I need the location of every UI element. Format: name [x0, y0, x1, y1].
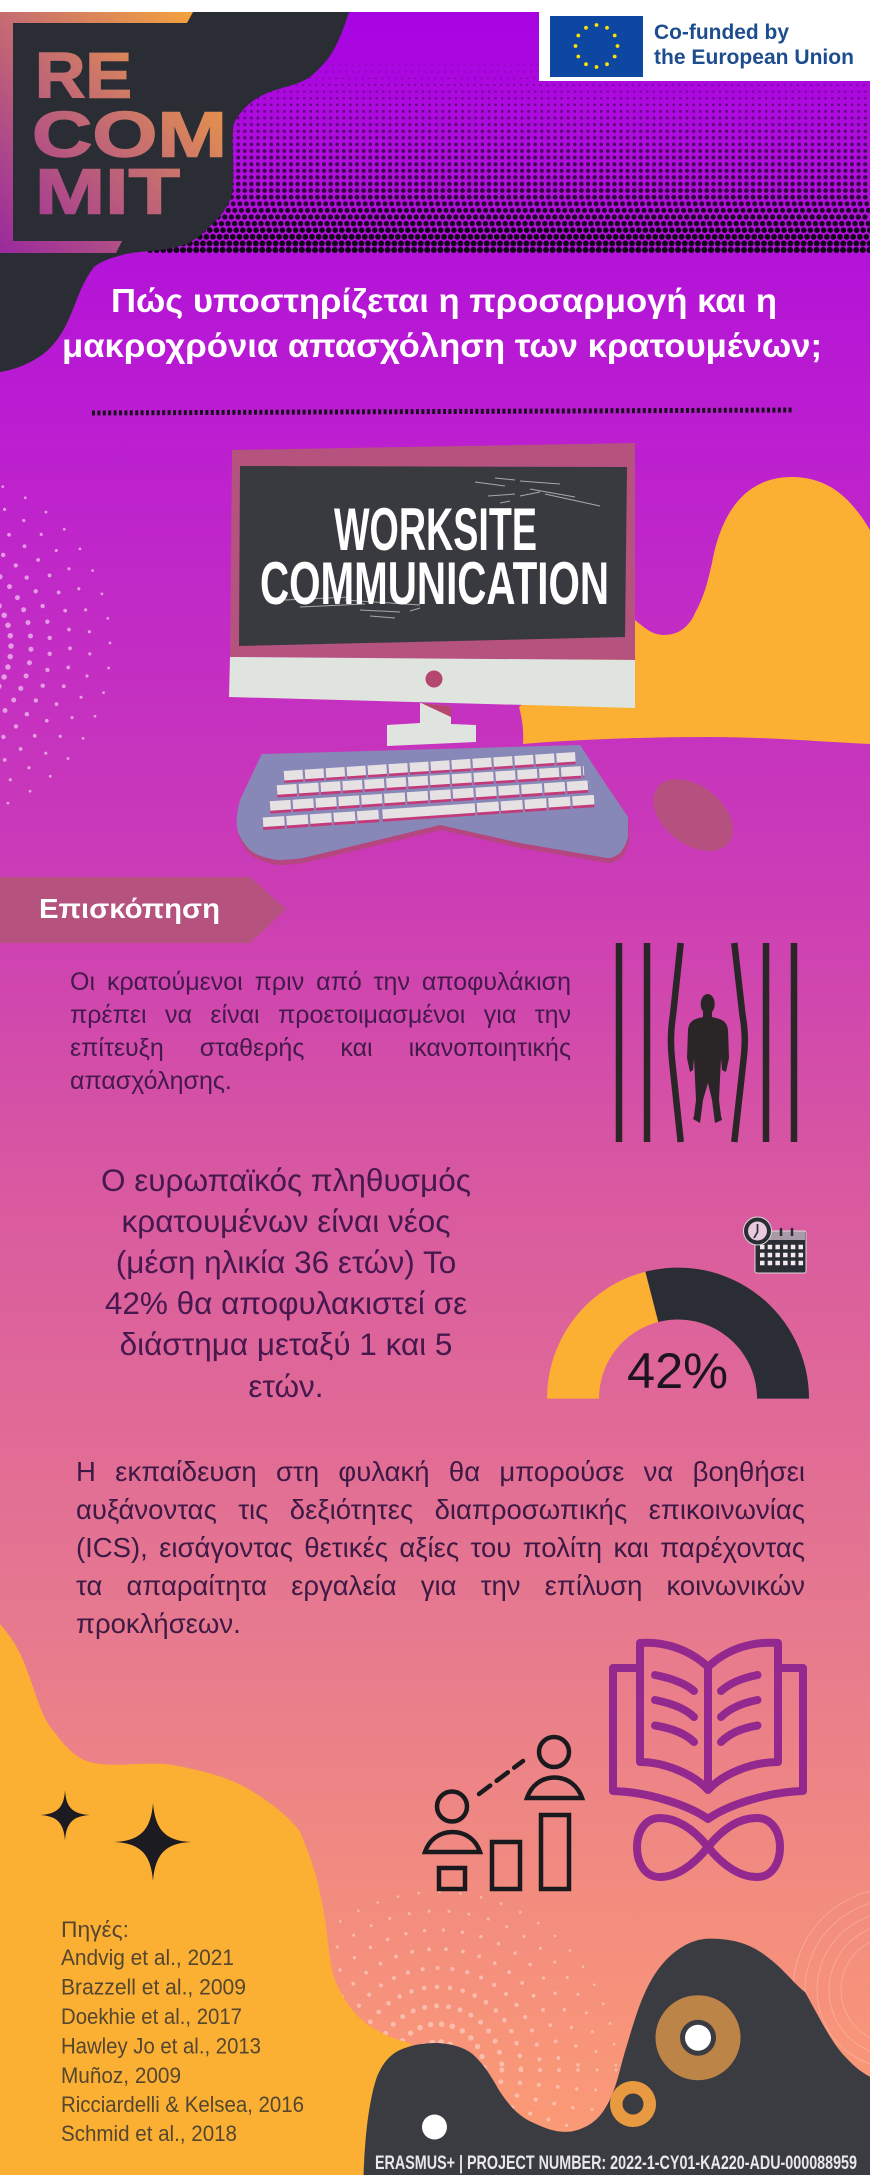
icon: stars [40, 1790, 191, 1881]
sources list: Andvig et al., 2021 [61, 1945, 234, 1970]
paragraph: prison education [76, 1456, 805, 1639]
logo: RECOMMIT: COM [32, 98, 227, 170]
paragraph: population statistic: διάστημα μεταξύ 1 και 5 [120, 1326, 452, 1362]
paragraph: prison education: προκλήσεων. [76, 1608, 241, 1639]
monitor stand [387, 703, 476, 746]
sources list: Doekhie et al., 2017 [61, 2004, 242, 2029]
paragraph: population statistic: κρατουμένων είναι νέος [122, 1203, 450, 1239]
paragraph: prisoners must be prepared: πρέπει να είναι προετοιμασμένοι για την [70, 1001, 571, 1029]
paragraph: prisoners must be prepared: επίτευξη σταθερής και ικανοποιητικής [70, 1034, 571, 1062]
title: μακροχρόνια απασχόληση των κρατουμένων; [62, 328, 822, 365]
EU co-funded badge: the European Union [654, 46, 854, 69]
icon: EU flag [550, 16, 643, 77]
brown ring [656, 1995, 740, 2080]
sources list: Muñoz, 2009 [61, 2063, 181, 2088]
decorative rings right [793, 1888, 870, 2092]
paragraph: prison education: Η εκπαίδευση στη φυλακή θα μπορούσε να βοηθήσει [76, 1456, 805, 1487]
monitor screen: COMMUNICATION [260, 550, 609, 617]
paragraph: prison education: αυξάνοντας τις δεξιότητες διαπροσωπικής επικοινωνίας [76, 1494, 805, 1525]
halftone dot band [150, 65, 870, 250]
paragraph: population statistic [101, 1162, 471, 1404]
sources list [61, 1917, 304, 2146]
sources list: Hawley Jo et al., 2013 [61, 2034, 261, 2059]
EU co-funded badge [539, 12, 870, 81]
paragraph: prisoners must be prepared [70, 968, 571, 1095]
paragraph: population statistic: ετών. [248, 1368, 324, 1404]
yellow blob behind monitor [519, 477, 870, 744]
keyboard [237, 745, 629, 865]
paragraph: prisoners must be prepared: Οι κρατούμενοι πριν από την αποφυλάκιση [70, 968, 571, 996]
gauge chart: 42% [547, 1268, 809, 1399]
white dot [422, 2114, 447, 2140]
logo: RECOMMIT [0, 12, 227, 253]
paragraph: population statistic: Ο ευρωπαϊκός πληθυσμός [101, 1162, 471, 1198]
gauge chart: 42%: 42% [627, 1343, 728, 1399]
section banner: overview: Επισκόπηση [39, 893, 220, 924]
paragraph: prison education: (ICS), εισάγοντας θετικές αξίες του πολίτη και παρέχοντας [76, 1532, 805, 1563]
decorative dots left of monitor [0, 471, 113, 821]
monitor bezel [230, 443, 635, 660]
title: Πώς υποστηρίζεται η προσαρμογή και η [111, 283, 777, 320]
monitor screen [239, 466, 627, 646]
icon: open book with infinity [613, 1643, 803, 1877]
dark corner blob [0, 12, 349, 372]
icon: clock and calendar [744, 1217, 806, 1273]
icon: growth people and bars [425, 1737, 582, 1889]
icon: prisoner between bent bars [619, 943, 794, 1142]
title [62, 283, 822, 365]
mouse [640, 764, 746, 866]
logo: RECOMMIT: MIT [35, 156, 180, 228]
sources list: Ricciardelli & Kelsea, 2016 [61, 2092, 304, 2117]
monitor screen: WORKSITE [334, 496, 537, 563]
decorative dots lower centre [260, 1892, 616, 2175]
EU co-funded badge: Co-funded by [654, 21, 789, 44]
section banner: overview [0, 877, 286, 943]
footer dark wave with circles [364, 1939, 870, 2175]
monitor chin [229, 657, 635, 708]
paragraph: population statistic: 42% θα αποφυλακιστεί σε [105, 1285, 467, 1321]
sources list: Schmid et al., 2018 [61, 2121, 237, 2146]
yellow blob bottom left [0, 1624, 420, 2175]
paragraph: prison education: τα απαραίτητα εργαλεία για την επίλυση κοινωνικών [76, 1570, 805, 1601]
paragraph: population statistic: (μέση ηλικία 36 ετών) Το [116, 1244, 456, 1280]
paragraph: prisoners must be prepared: απασχόλησης. [70, 1067, 232, 1095]
illustration: desktop computer [229, 443, 746, 866]
orange ring [610, 2081, 656, 2127]
sources list: Πηγές: [61, 1917, 129, 1942]
sources list: Brazzell et al., 2009 [61, 1974, 246, 2000]
logo: RECOMMIT: RE [35, 40, 132, 112]
